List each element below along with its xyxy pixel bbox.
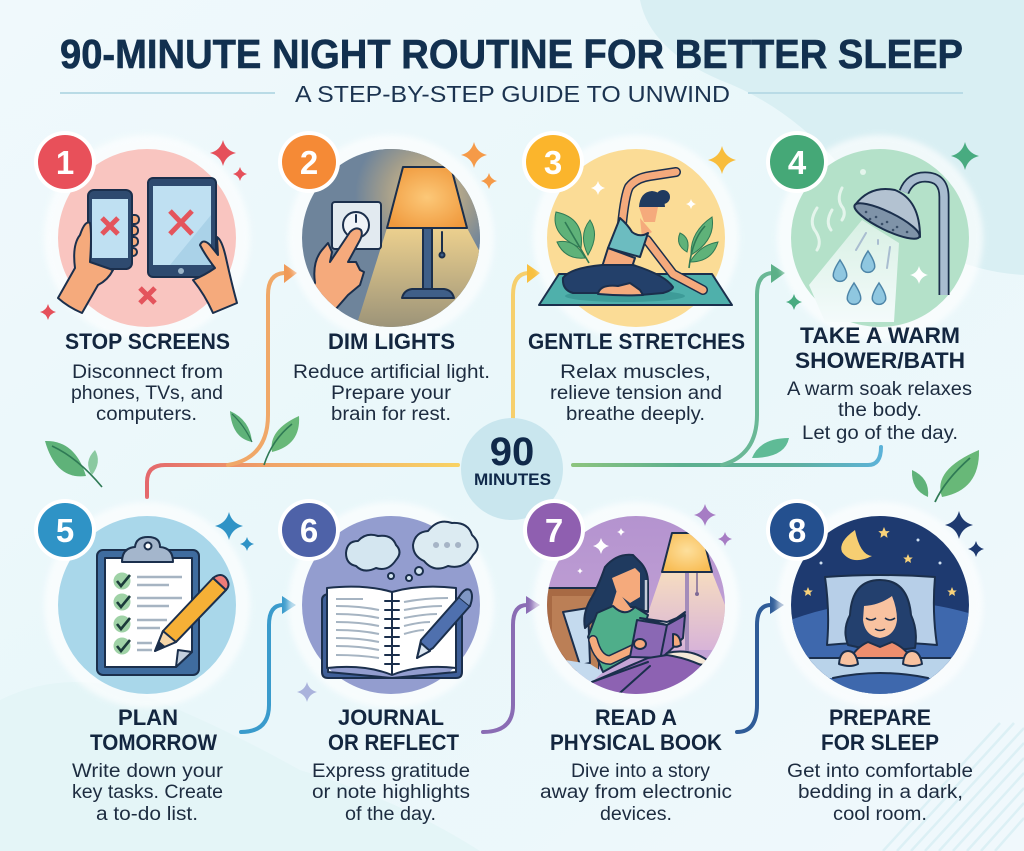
sparkles — [461, 142, 497, 189]
badge 1: 1 — [56, 144, 74, 181]
text block — [787, 379, 972, 444]
text block: a to-do list. — [96, 804, 198, 825]
sparkles — [40, 140, 247, 320]
badge 3 — [522, 131, 584, 193]
center badge: 90 minutes — [461, 418, 563, 520]
icon: clipboard and pencil — [97, 537, 228, 675]
text block: Prepare your — [331, 383, 452, 404]
sparkles — [591, 146, 736, 209]
text block: or note highlights — [312, 782, 470, 803]
sparkles — [945, 511, 984, 557]
text block: Relax muscles, — [560, 362, 711, 383]
text block — [72, 761, 224, 825]
badge 4: 4 — [788, 144, 807, 181]
badge 5 — [34, 499, 96, 561]
heading: STOP SCREENS — [65, 329, 230, 354]
text block: Write down your — [72, 761, 224, 782]
icon: lamp and switch — [313, 149, 480, 327]
connector: step 5 to 6 — [241, 596, 296, 732]
heading: GENTLE STRETCHES — [528, 329, 745, 354]
icon: hands with phone and tablet — [58, 178, 237, 313]
badge 2: 2 — [300, 144, 318, 181]
icon: open book, clouds and pen — [322, 522, 478, 678]
heading: FOR SLEEP — [821, 730, 939, 755]
sparkles — [215, 512, 254, 551]
badge 5: 5 — [56, 512, 74, 549]
text block: relieve tension and — [550, 383, 722, 404]
text block: cool room. — [833, 804, 927, 825]
text block — [293, 362, 490, 425]
text block: A warm soak relaxes — [787, 379, 972, 400]
text block: Express gratitude — [312, 761, 470, 782]
heading — [795, 323, 965, 373]
text block: of the day. — [345, 804, 436, 825]
text block: Dive into a story — [571, 761, 710, 782]
heading: TOMORROW — [90, 730, 217, 755]
heading: PLAN — [118, 705, 178, 730]
text block: bedding in a dark, — [798, 782, 963, 803]
panel: step 3 gentle stretches — [522, 131, 745, 425]
badge 7: 7 — [545, 512, 563, 549]
connector: step 6 to 7 — [483, 596, 540, 732]
sparkles — [577, 504, 732, 574]
text block: brain for rest. — [331, 404, 451, 425]
text block: Let go of the day. — [802, 423, 958, 444]
connector: trunk to step 4 — [573, 264, 881, 465]
heading — [90, 705, 217, 755]
heading: SHOWER/BATH — [795, 348, 965, 373]
text block: Disconnect from — [72, 362, 223, 383]
badge 1 — [34, 131, 96, 193]
center badge: 90 minutes: 90 — [490, 430, 534, 474]
icon: sleeping woman at night — [792, 527, 969, 694]
text block: devices. — [600, 804, 672, 825]
text block — [787, 761, 973, 825]
panel: step 4 warm shower — [766, 131, 983, 444]
heading: PREPARE — [829, 705, 931, 730]
text block: away from electronic — [540, 782, 732, 803]
heading: PHYSICAL BOOK — [550, 730, 722, 755]
heading — [550, 705, 722, 755]
panel: step 1 stop screens — [34, 131, 250, 425]
panel: step 5 plan tomorrow — [34, 499, 254, 825]
panel: step 7 read a physical book — [523, 499, 739, 825]
badge 4 — [766, 131, 828, 193]
connector: step 7 to 8 — [737, 596, 784, 732]
badge 8 — [766, 499, 828, 561]
badge 7 — [523, 499, 585, 561]
text block: phones, TVs, and — [71, 383, 223, 404]
connector: trunk to steps 1 to 3 — [147, 264, 540, 497]
heading: JOURNAL — [338, 705, 444, 730]
panel: step 2 dim lights — [278, 123, 499, 425]
badge 2 — [278, 131, 340, 193]
text block: key tasks. Create — [72, 782, 223, 803]
text block: computers. — [96, 404, 197, 425]
center badge: 90 minutes: MINUTES — [474, 470, 551, 489]
badge 6: 6 — [300, 512, 318, 549]
text block: Get into comfortable — [787, 761, 973, 782]
panel: step 6 journal or reflect — [278, 499, 494, 825]
badge 3: 3 — [544, 144, 562, 181]
text block — [71, 362, 223, 425]
text block: Reduce artificial light. — [293, 362, 490, 383]
text block — [312, 761, 470, 825]
icon: yoga figure on mat — [539, 172, 732, 305]
icon: woman reading in bed — [540, 533, 730, 700]
text block: breathe deeply. — [566, 404, 705, 425]
badge 6 — [278, 499, 340, 561]
badge 8: 8 — [788, 512, 806, 549]
icon: shower head with drops — [809, 169, 944, 322]
text block — [550, 362, 722, 425]
sparkle — [297, 682, 317, 702]
heading: OR REFLECT — [328, 730, 460, 755]
text block: the body. — [838, 400, 922, 421]
leaves decoration — [45, 411, 979, 502]
heading — [328, 705, 460, 755]
heading: DIM LIGHTS — [328, 329, 455, 354]
heading: READ A — [595, 705, 677, 730]
panel: step 8 prepare for sleep — [766, 499, 984, 825]
subtitle: A STEP-BY-STEP GUIDE TO UNWIND — [295, 81, 730, 107]
sparkles — [786, 142, 979, 310]
heading: TAKE A WARM — [800, 323, 960, 348]
heading — [821, 705, 939, 755]
title: 90-MINUTE NIGHT ROUTINE FOR BETTER SLEEP — [60, 31, 963, 77]
text block — [540, 761, 732, 825]
